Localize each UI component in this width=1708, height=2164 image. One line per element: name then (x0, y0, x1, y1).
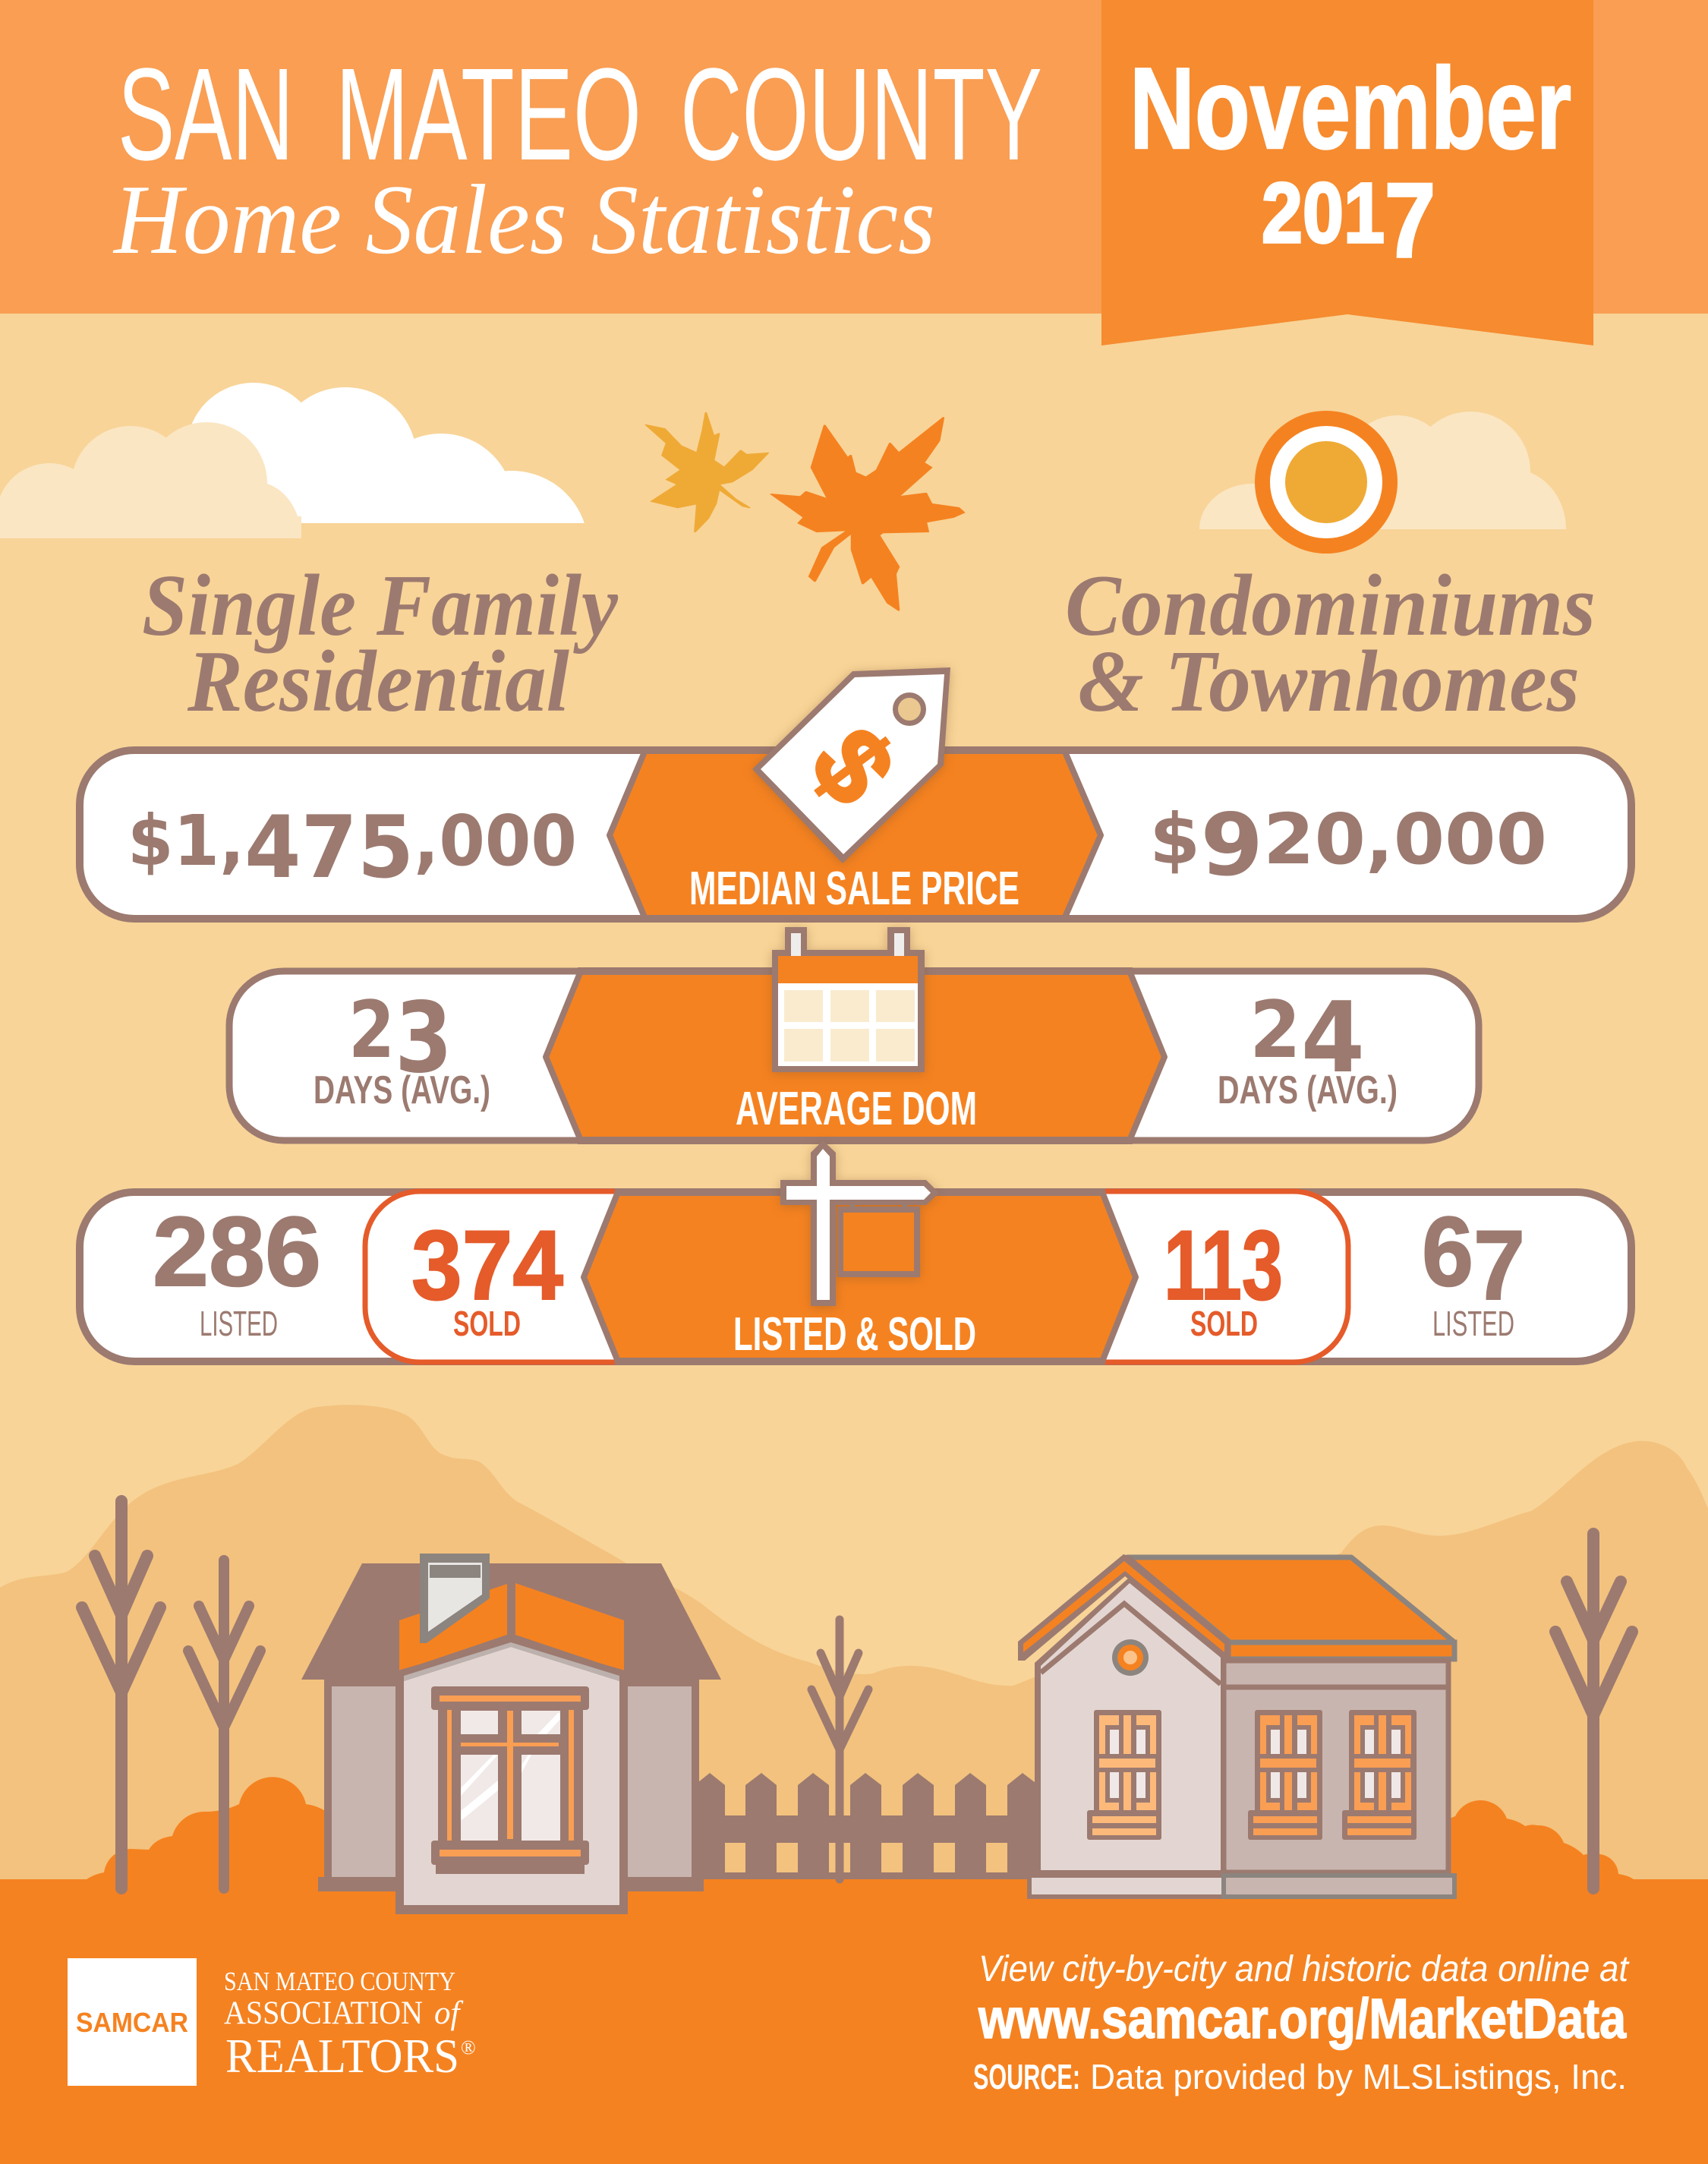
heading: condominiums: Condominiums (1065, 557, 1596, 654)
title: SAN (118, 40, 294, 188)
cloud: pale right (1199, 412, 1566, 529)
year: 7 (1385, 162, 1435, 279)
window (431, 1686, 589, 1874)
right house (1018, 1554, 1454, 1897)
heading: condominiums (1065, 557, 1596, 730)
organisation name: ® (461, 2036, 476, 2058)
bushes: left (87, 1777, 326, 1883)
window: front (1087, 1710, 1161, 1840)
dormer (399, 1584, 507, 1671)
chimney (420, 1554, 490, 1643)
value: condo sold: 113 (1164, 1210, 1283, 1320)
cloud: white (191, 383, 585, 523)
round window (1112, 1639, 1149, 1676)
panel: listed and sold (80, 1188, 1631, 1365)
logo: samcar: SAMCAR (76, 2007, 188, 2038)
icon: calendar (772, 927, 925, 1072)
value: single family listed: 286 (153, 1196, 321, 1307)
header band (0, 0, 1708, 314)
heading: single family: Single Family (142, 557, 619, 654)
label: average dom: AVERAGE DOM (736, 1083, 977, 1135)
subtitle: Home Sales Statistics (112, 165, 935, 275)
organisation name: REALTORS (225, 2029, 459, 2083)
organisation name: ASSOCIATION (224, 1995, 423, 2031)
icon: for sale sign (780, 1140, 939, 1306)
value: condo days: 4 (1301, 982, 1365, 1095)
value: single family days: 3 (395, 982, 452, 1095)
value: single family price: $1, (128, 800, 251, 882)
icon: small leaf (646, 413, 768, 532)
front wall (1035, 1577, 1226, 1875)
value: condo days: 2 (1249, 985, 1304, 1076)
heading: single family (142, 557, 619, 730)
left house (301, 1554, 721, 1914)
label: median sale price: MEDIAN SALE PRICE (689, 863, 1019, 915)
title: MATEO (336, 40, 641, 188)
main roof (1127, 1557, 1454, 1642)
label: listed and sold: LISTED & SOLD (733, 1308, 976, 1361)
footer: source: Data provided by MLSListings, Inc. (1090, 2057, 1627, 2096)
roof (301, 1563, 721, 1680)
icon: sun (1255, 411, 1398, 554)
caption: days: DAYS (AVG.) (314, 1068, 490, 1112)
caption: listed: LISTED (200, 1304, 278, 1343)
value: condo price: 9 (1200, 795, 1263, 895)
caption: sold: SOLD (1190, 1304, 1258, 1343)
organisation name: of (434, 1995, 463, 2031)
side wings (324, 1680, 699, 1885)
ribbon: date (1101, 0, 1593, 345)
title: COUNTY (680, 40, 1042, 188)
bushes: right (1446, 1800, 1634, 1883)
fence (695, 1773, 1040, 1879)
value: condo price: $ (1149, 799, 1198, 880)
base (1029, 1875, 1224, 1897)
value: condo listed: 6 (1422, 1196, 1476, 1307)
hills (0, 1405, 1708, 1883)
window: side right (1342, 1710, 1417, 1840)
caption: listed: LISTED (1432, 1304, 1514, 1343)
fascia (1228, 1642, 1454, 1659)
tree 1 (82, 1501, 160, 1888)
year: 201 (1262, 166, 1404, 260)
footer: view online: View city-by-city and historic data online at (978, 1949, 1630, 1989)
value: condo listed: 7 (1473, 1210, 1525, 1320)
organisation name (224, 1967, 476, 2083)
panel: average dom (229, 967, 1479, 1144)
month: November (1130, 44, 1571, 173)
front gable (395, 1638, 628, 1914)
value: single family price: 475 (244, 797, 414, 897)
icon: price tag: $ (788, 706, 919, 825)
value: condo price: 20,000 (1263, 799, 1547, 880)
caption: days: DAYS (AVG.) (1218, 1068, 1398, 1112)
heading: single family: Residential (187, 633, 569, 730)
value: single family days: 2 (348, 985, 403, 1076)
panel: median sale price (80, 746, 1631, 923)
footer: source: SOURCE: (973, 2057, 1080, 2096)
icon: price tag (752, 667, 950, 863)
tree 2 (188, 1560, 260, 1888)
tree 4 (1555, 1534, 1632, 1888)
value: single family price: ,000 (414, 800, 577, 882)
caption: sold: SOLD (453, 1304, 521, 1343)
icon: large leaf (771, 418, 964, 610)
organisation name: SAN MATEO COUNTY (224, 1967, 455, 1996)
cloud: pale left (0, 422, 301, 538)
value: single family sold: 374 (411, 1210, 563, 1320)
ground (0, 1879, 1708, 2164)
heading: condominiums: & Townhomes (1078, 633, 1580, 730)
gable roof band (1018, 1554, 1231, 1661)
right wall (1224, 1661, 1448, 1872)
tree 3 (811, 1620, 868, 1879)
title (118, 40, 1042, 188)
logo: samcar (68, 1958, 197, 2086)
window: side left (1248, 1710, 1322, 1840)
